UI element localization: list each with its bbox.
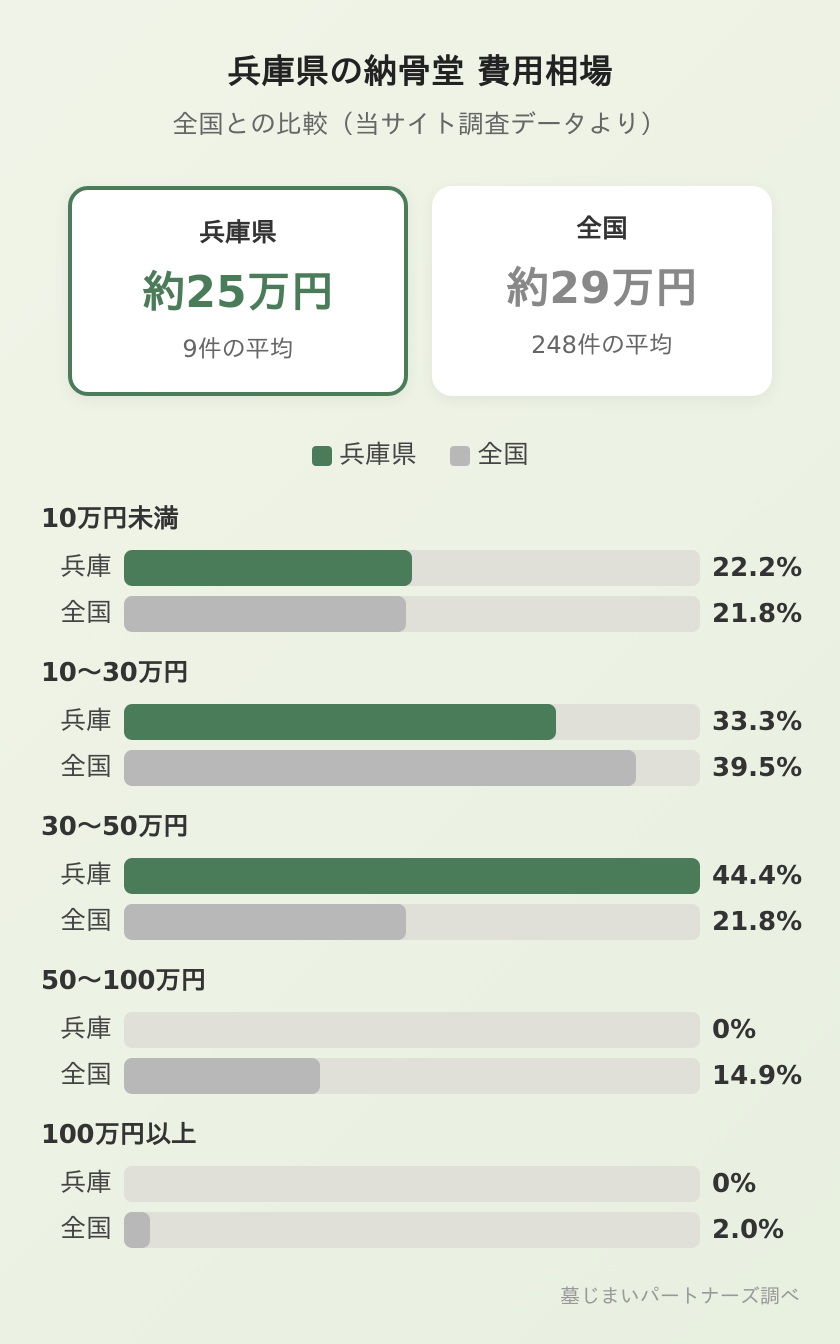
bar: Hyogo 22.2% bbox=[124, 550, 700, 586]
bar: Hyogo 0% bbox=[124, 1012, 700, 1048]
legend swatch: Hyogo bbox=[312, 446, 332, 466]
bar: Hyogo 44.4% bbox=[124, 858, 700, 894]
value: 21.8% bbox=[712, 599, 802, 629]
label: 全国 bbox=[60, 1214, 112, 1244]
legend label: national: 全国 bbox=[477, 440, 529, 470]
bar: Hyogo 33.3% bbox=[124, 704, 700, 740]
bar: Hyogo 0% bbox=[124, 1166, 700, 1202]
legend swatch: national bbox=[450, 446, 470, 466]
label: 全国 bbox=[60, 598, 112, 628]
value: 33.3% bbox=[712, 707, 802, 737]
national heading: 全国 bbox=[576, 214, 628, 244]
panel: 100-300k yen bbox=[41, 658, 802, 786]
bar: national 21.8% bbox=[124, 596, 700, 632]
range heading: 30〜50万円 bbox=[41, 812, 189, 842]
value: 0% bbox=[712, 1015, 756, 1045]
value: 22.2% bbox=[712, 553, 802, 583]
range heading: 10万円未満 bbox=[41, 504, 179, 534]
bar: national 14.9% bbox=[124, 1058, 700, 1094]
value: 0% bbox=[712, 1169, 756, 1199]
bar: national 2.0% bbox=[124, 1212, 700, 1248]
panel: under 100k yen bbox=[41, 504, 802, 632]
panel: over 1M yen bbox=[41, 1120, 784, 1248]
range heading: 100万円以上 bbox=[41, 1120, 196, 1150]
panel: Hyogo average bbox=[68, 186, 408, 396]
source note: 墓じまいパートナーズ調べ bbox=[560, 1284, 800, 1308]
bar: national 39.5% bbox=[124, 750, 700, 786]
label: 兵庫 bbox=[60, 860, 112, 890]
value: 14.9% bbox=[712, 1061, 802, 1091]
panel: 300-500k yen bbox=[41, 812, 802, 940]
label: 全国 bbox=[60, 906, 112, 936]
label: 全国 bbox=[60, 752, 112, 782]
national price: 約29万円 bbox=[505, 263, 699, 314]
label: 全国 bbox=[60, 1060, 112, 1090]
value: 44.4% bbox=[712, 861, 802, 891]
legend label: Hyogo: 兵庫県 bbox=[339, 440, 417, 470]
value: 2.0% bbox=[712, 1215, 784, 1245]
panel: 500k-1M yen bbox=[41, 966, 802, 1094]
Hyogo sample count: 9件の平均 bbox=[182, 335, 294, 363]
label: 兵庫 bbox=[60, 1014, 112, 1044]
label: 兵庫 bbox=[60, 706, 112, 736]
value: 39.5% bbox=[712, 753, 802, 783]
value: 21.8% bbox=[712, 907, 802, 937]
title: 兵庫県の納骨堂 費用相場 bbox=[227, 52, 613, 92]
Hyogo heading: 兵庫県 bbox=[199, 218, 277, 248]
range heading: 50〜100万円 bbox=[41, 966, 206, 996]
national sample count: 248件の平均 bbox=[531, 331, 673, 359]
label: 兵庫 bbox=[60, 1168, 112, 1198]
legend bbox=[312, 440, 529, 470]
panel: national average bbox=[432, 186, 772, 396]
range heading: 10〜30万円 bbox=[41, 658, 189, 688]
subtitle: 全国との比較（当サイト調査データより） bbox=[172, 110, 666, 140]
bar: national 21.8% bbox=[124, 904, 700, 940]
label: 兵庫 bbox=[60, 552, 112, 582]
Hyogo price: 約25万円 bbox=[141, 267, 335, 318]
